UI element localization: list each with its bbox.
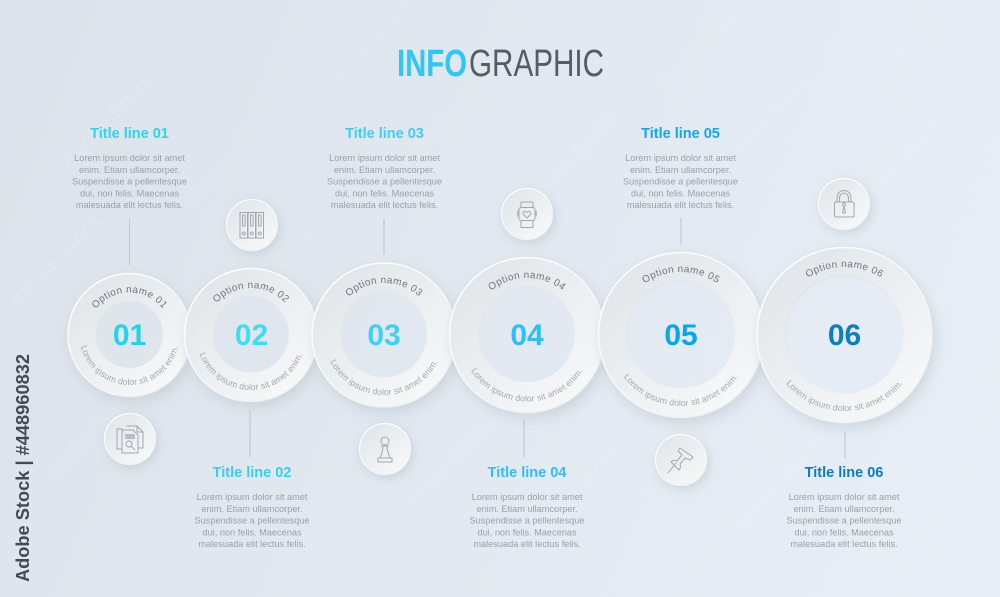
stock id: Adobe Stock | #448960832: [13, 354, 33, 582]
text block 04: enim. Etiam ullamcorper.: [476, 504, 578, 514]
ring 03: Lorem ipsum dolor sit amet enim.: [330, 359, 438, 395]
text block 04: [470, 465, 584, 549]
text block 04: Lorem ipsum dolor sit amet: [472, 492, 583, 502]
ring 05: Option name 05: [642, 266, 720, 282]
icon: push pin: [656, 434, 706, 486]
watermark: Adobe Stock: [180, 109, 282, 212]
text block 03: enim. Etiam ullamcorper.: [334, 165, 435, 175]
text block 01: malesuada elit lectus felis.: [76, 200, 183, 210]
ring 06: Lorem ipsum dolor sit amet enim.: [786, 380, 902, 411]
ring 04: [448, 256, 604, 421]
text block 02: Title line 02: [213, 465, 291, 481]
ring 01: Lorem ipsum dolor sit amet enim.: [81, 346, 178, 385]
text block 04: malesuada elit lectus felis.: [473, 539, 581, 549]
text block 05: Title line 05: [641, 126, 720, 142]
ring 03: Option name 03: [346, 278, 422, 296]
icon: chess pawn: [360, 424, 410, 474]
watermark: Adobe Stock: [5, 209, 107, 312]
text block 06: Suspendisse a pellentesque: [787, 516, 901, 526]
text block 02: dui, non felis. Maecenas: [202, 527, 302, 537]
watermark: Adobe Stock: [525, 439, 627, 542]
text block 05: dui, non felis. Maecenas: [631, 188, 730, 198]
watermark: Adobe Stock: [715, 69, 817, 172]
ring 02: [183, 268, 318, 410]
text block 06: enim. Etiam ullamcorper.: [793, 504, 895, 514]
ring 02: Lorem ipsum dolor sit amet enim.: [200, 352, 302, 390]
text block 05: enim. Etiam ullamcorper.: [630, 165, 731, 175]
text block 03: dui, non felis. Maecenas: [335, 188, 434, 198]
ring 06: [755, 246, 939, 432]
text block 01: Title line 01: [90, 126, 169, 142]
watermark: Adobe Stock: [385, 79, 487, 182]
text block 05: Lorem ipsum dolor sit amet: [625, 153, 736, 163]
text block 02: [195, 465, 309, 549]
icon: smartwatch: [502, 188, 552, 240]
text block 06: [787, 465, 901, 549]
ring 04: Option name 04: [488, 272, 566, 290]
ring 02: 02: [235, 319, 268, 352]
ring 01: 01: [113, 319, 146, 352]
text block 02: Lorem ipsum dolor sit amet: [197, 492, 308, 502]
text block 04: Title line 04: [488, 465, 566, 481]
title: [397, 43, 604, 85]
ring 05: Lorem ipsum dolor sit amet enim.: [624, 374, 738, 406]
connector lines: [130, 218, 845, 458]
text block 02: malesuada elit lectus felis.: [198, 539, 306, 549]
title: INFO: [397, 43, 467, 85]
watermark: Adobe Stock: [895, 239, 997, 342]
watermark: Adobe Stock: [40, 384, 142, 487]
text block 01: Lorem ipsum dolor sit amet: [74, 153, 185, 163]
text block 03: Suspendisse a pellentesque: [327, 177, 442, 187]
ring 04: 04: [510, 319, 544, 352]
ring 05: [596, 252, 764, 426]
text block 04: dui, non felis. Maecenas: [477, 527, 577, 537]
ring 03: 03: [367, 319, 401, 352]
text block 01: dui, non felis. Maecenas: [80, 188, 179, 198]
text block 03: Title line 03: [345, 126, 424, 142]
title: GRAPHIC: [469, 43, 604, 85]
ring 06: Option name 06: [806, 262, 884, 276]
text block 05: malesuada elit lectus felis.: [627, 200, 734, 210]
watermark: Adobe Stock: [855, 464, 957, 567]
text block 01: Suspendisse a pellentesque: [72, 177, 187, 187]
text block 04: Suspendisse a pellentesque: [470, 516, 584, 526]
ring 05: 05: [664, 319, 698, 352]
text block 02: enim. Etiam ullamcorper.: [201, 504, 303, 514]
watermark: Adobe Stock: [57, 69, 159, 172]
watermark: Adobe Stock: [220, 224, 322, 327]
watermark: Adobe Stock: [520, 109, 622, 212]
text block 02: Suspendisse a pellentesque: [195, 516, 309, 526]
ring 01: Option name 01: [92, 287, 166, 308]
text block 06: Lorem ipsum dolor sit amet: [789, 492, 900, 502]
ring 06: 06: [828, 319, 861, 352]
watermark: Adobe Stock: [725, 434, 827, 537]
icon: documents search: [104, 414, 156, 464]
text block 06: Title line 06: [805, 465, 883, 481]
text block 05: Suspendisse a pellentesque: [623, 177, 738, 187]
watermark: Adobe Stock: [845, 114, 947, 217]
ring 02: Option name 02: [213, 282, 289, 302]
watermark: Adobe Stock: [395, 414, 497, 517]
ring 04: Lorem ipsum dolor sit amet enim.: [471, 368, 582, 402]
text block 03: Lorem ipsum dolor sit amet: [329, 153, 440, 163]
text block 06: malesuada elit lectus felis.: [790, 539, 898, 549]
text block 03: malesuada elit lectus felis.: [331, 200, 438, 210]
ring 01: [67, 272, 190, 404]
text block 03: [327, 126, 442, 210]
ring 03: [310, 262, 456, 416]
text block 01: [72, 126, 187, 210]
icon: padlock: [818, 178, 870, 230]
text block 05: [623, 126, 738, 210]
text block 01: enim. Etiam ullamcorper.: [79, 165, 180, 175]
icon: binders: [226, 200, 278, 250]
text block 06: dui, non felis. Maecenas: [794, 527, 894, 537]
